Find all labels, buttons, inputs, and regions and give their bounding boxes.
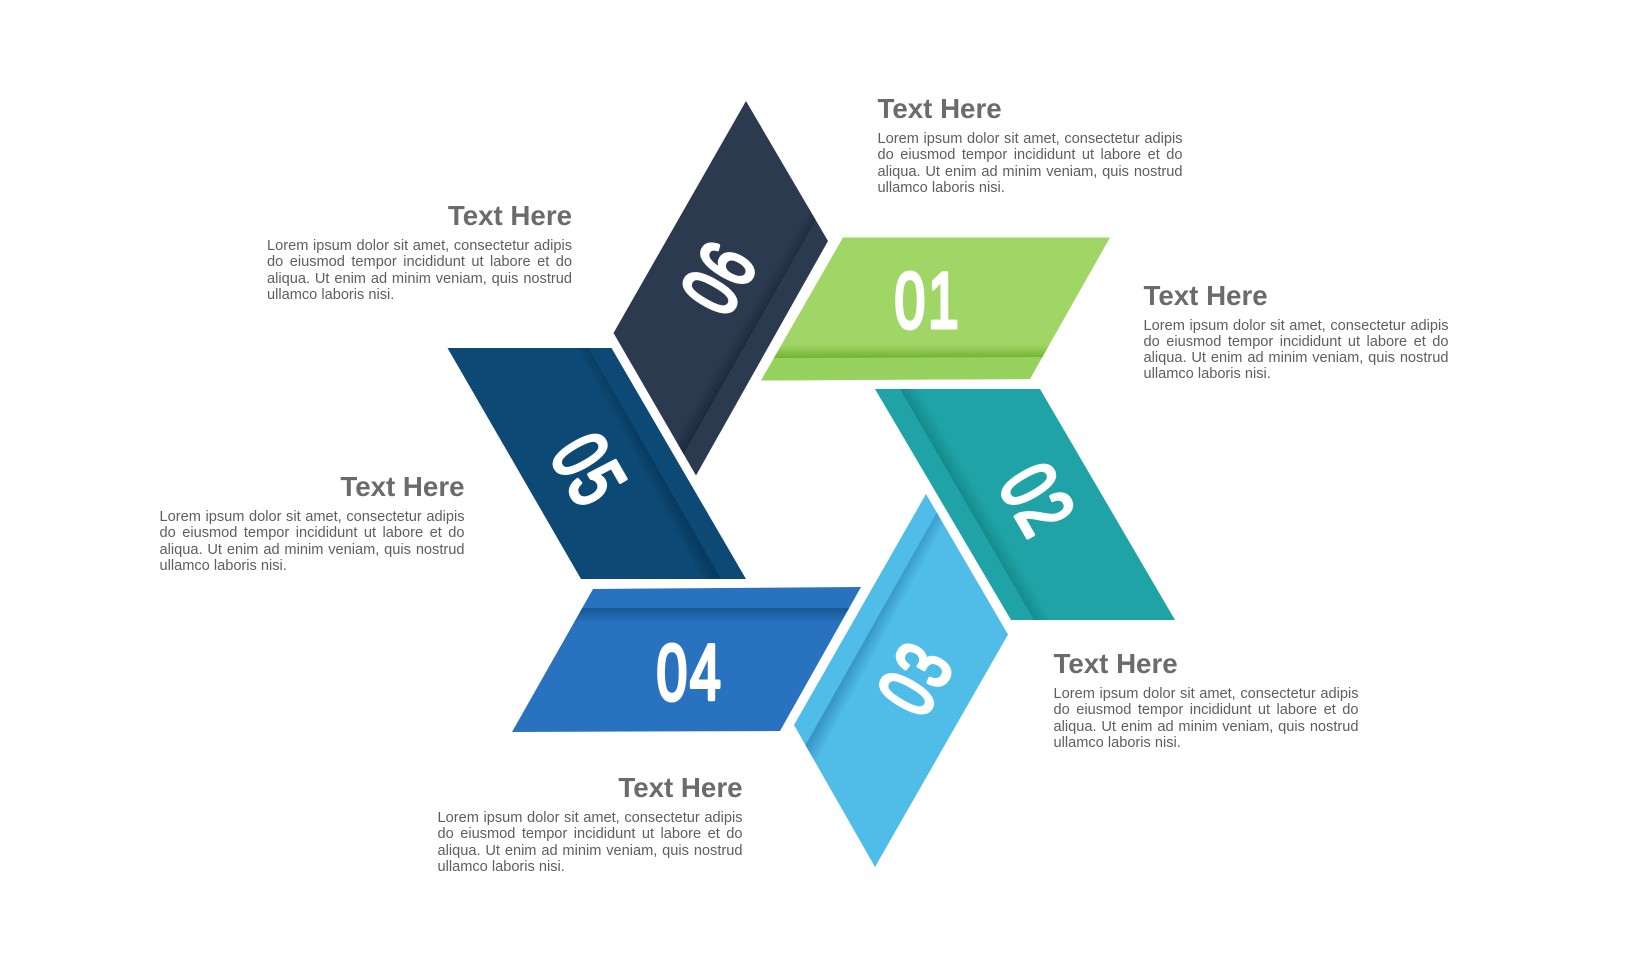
- body text: [438, 810, 742, 875]
- body text: Lorem ipsum dolor sit amet, consectetur adipis: [438, 810, 742, 826]
- text block: step 01: [1144, 280, 1448, 382]
- body text: ullamco laboris nisi.: [1054, 735, 1181, 751]
- heading: Text Here: [448, 200, 572, 231]
- heading: Text Here: [618, 772, 742, 803]
- body text: do eiusmod tempor incididunt ut labore et do: [438, 826, 742, 842]
- heading: Text Here: [340, 471, 464, 502]
- hexagonal star diagram: [448, 101, 1175, 867]
- body text: aliqua. Ut enim ad minim veniam, quis nostrud: [267, 271, 572, 287]
- panel 03: light blue rhombus: [794, 494, 1008, 867]
- number 05: 05: [534, 419, 644, 521]
- body text: Lorem ipsum dolor sit amet, consectetur adipis: [267, 238, 572, 254]
- text block: step 03: [1054, 648, 1358, 751]
- body text: ullamco laboris nisi.: [878, 180, 1005, 196]
- text block: top (step 06 side): [878, 93, 1182, 196]
- body text: do eiusmod tempor incididunt ut labore et do: [878, 147, 1182, 163]
- body text: aliqua. Ut enim ad minim veniam, quis nostrud: [1144, 350, 1448, 366]
- body text: do eiusmod tempor incididunt ut labore et do: [267, 254, 572, 270]
- body text: do eiusmod tempor incididunt ut labore et do: [160, 525, 464, 541]
- text block: step 06: [267, 200, 572, 303]
- body text: aliqua. Ut enim ad minim veniam, quis nostrud: [878, 164, 1182, 180]
- heading: Text Here: [1054, 648, 1178, 679]
- panel 05: navy parallelogram: [448, 348, 746, 579]
- panel 01: green parallelogram: [761, 238, 1110, 380]
- heading: Text Here: [1144, 280, 1268, 310]
- number 03: 03: [861, 627, 971, 729]
- body text: do eiusmod tempor incididunt ut labore et do: [1144, 334, 1448, 350]
- body text: aliqua. Ut enim ad minim veniam, quis nostrud: [1054, 719, 1358, 735]
- panel 04: blue parallelogram: [512, 587, 870, 732]
- body text: Lorem ipsum dolor sit amet, consectetur adipis: [1144, 318, 1448, 334]
- body text: ullamco laboris nisi.: [267, 287, 394, 303]
- body text: [1144, 318, 1448, 382]
- body text: Lorem ipsum dolor sit amet, consectetur adipis: [1054, 686, 1358, 702]
- body text: [1054, 686, 1358, 751]
- heading: Text Here: [878, 93, 1002, 124]
- body text: ullamco laboris nisi.: [1144, 366, 1271, 382]
- panel 06: dark slate rhombus: [614, 101, 828, 478]
- body text: Lorem ipsum dolor sit amet, consectetur adipis: [160, 509, 464, 525]
- text block: step 05: [160, 471, 464, 574]
- number 01: 01: [894, 257, 962, 345]
- body text: do eiusmod tempor incididunt ut labore et do: [1054, 702, 1358, 718]
- body text: Lorem ipsum dolor sit amet, consectetur adipis: [878, 131, 1182, 147]
- body text: ullamco laboris nisi.: [160, 558, 287, 574]
- panel 02: teal parallelogram: [875, 389, 1175, 620]
- number 06: 06: [665, 226, 775, 328]
- body text: [267, 238, 572, 303]
- text block: step 04: [438, 772, 742, 875]
- body text: aliqua. Ut enim ad minim veniam, quis nostrud: [438, 843, 742, 859]
- body text: [878, 131, 1182, 196]
- body text: [160, 509, 464, 574]
- number 04: 04: [656, 629, 724, 717]
- number 02: 02: [982, 449, 1092, 551]
- body text: ullamco laboris nisi.: [438, 859, 565, 875]
- body text: aliqua. Ut enim ad minim veniam, quis nostrud: [160, 542, 464, 558]
